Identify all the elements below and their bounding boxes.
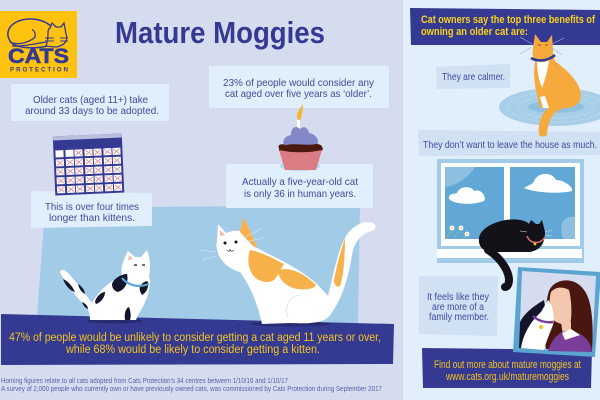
- callout: family member: are more of a: [432, 301, 484, 313]
- footnote: [1, 376, 382, 393]
- banner: likelihood statistics: while 68% would be likely to consider getting a kitten.: [65, 344, 320, 356]
- logo: Cats Protection: [0, 11, 77, 78]
- callout: four times longer: longer than kittens.: [49, 212, 135, 224]
- callout: human years: is only 36 in human years.: [244, 188, 356, 200]
- callout: human years: [226, 164, 373, 208]
- panel: light blue backdrop: [37, 205, 360, 325]
- callout: days to adoption: Older cats (aged 11+) take: [33, 94, 148, 106]
- illustration: framed photo of woman and cat: [513, 267, 600, 357]
- banner: likelihood statistics: [1, 314, 394, 365]
- logo: Cats Protection: PROTECTION: [10, 68, 68, 74]
- callout: older cat perception: 23% of people would consider any: [223, 77, 375, 89]
- icon: cupcake: [278, 104, 323, 171]
- illustration: window with black cat: [437, 159, 584, 287]
- callout: stay at home: [418, 130, 600, 156]
- heading: top three benefits: [410, 8, 600, 45]
- callout: days to adoption: around 33 days to be adopted.: [25, 105, 159, 117]
- logo: Cats Protection: CATS: [8, 45, 69, 68]
- icon: calendar: [53, 134, 124, 195]
- panel: right benefits background: [403, 0, 600, 400]
- illustration: white and orange cat: [200, 218, 375, 326]
- banner: find out more: [422, 348, 592, 388]
- illustration: orange cat: [520, 34, 581, 137]
- callout: four times longer: This is over four times: [45, 201, 139, 213]
- footnote: Homing figures relate to all cats adopted from Cats Protection’s 34 centres between 1/10/16 and 1/10/17: [1, 376, 288, 385]
- illustration: rug: [499, 88, 600, 126]
- callout: days to adoption: [11, 84, 169, 121]
- callout: human years: Actually a five-year-old cat: [242, 176, 358, 188]
- footnote: A survey of 2,000 people who currently own or have previously owned cats, was commissioned by Cats Protection during September 2017: [1, 384, 382, 393]
- illustration: black and white cat: [60, 250, 150, 324]
- callout: family member: It feels like they: [427, 291, 490, 303]
- callout: older cat perception: [209, 66, 389, 108]
- callout: calmer: They are calmer.: [442, 71, 505, 83]
- heading: top three benefits: owning an older cat are:: [421, 26, 528, 38]
- illustration: orange cat tail tip: [539, 131, 547, 136]
- callout: calmer: [436, 64, 510, 89]
- title: Mature Moggies: [115, 15, 325, 50]
- callout: four times longer: [31, 191, 152, 228]
- callout: family member: [419, 276, 498, 336]
- callout: older cat perception: cat aged over five years as ‘older’.: [225, 88, 372, 100]
- callout: family member: family member.: [429, 311, 489, 323]
- banner: likelihood statistics: 47% of people would be unlikely to consider getting a cat aged 11 years or over,: [9, 332, 381, 344]
